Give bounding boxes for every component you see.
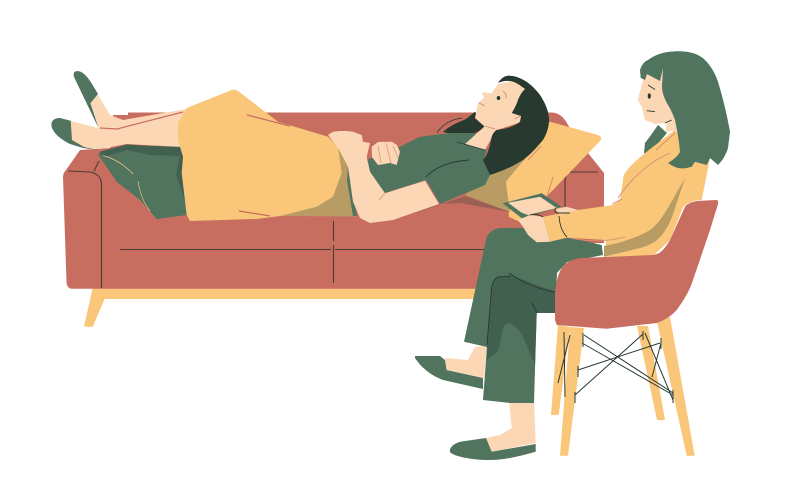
shirt edge bbox=[347, 166, 357, 216]
seat shell bbox=[555, 200, 718, 329]
lower foot bbox=[486, 400, 536, 452]
therapist bbox=[415, 51, 730, 460]
thumb bbox=[555, 207, 578, 215]
upper foot bbox=[91, 95, 187, 147]
back foot bbox=[445, 346, 487, 378]
sofa leg bbox=[84, 288, 118, 327]
chair back legs bbox=[551, 325, 665, 420]
back shoe bbox=[415, 356, 483, 389]
skirt creases bbox=[239, 115, 290, 216]
face bbox=[475, 81, 526, 130]
pillow bbox=[465, 122, 601, 222]
arm and hand bbox=[328, 131, 439, 223]
chair bbox=[555, 200, 718, 456]
yellow skirt bbox=[178, 90, 342, 221]
skirt shadow bbox=[280, 140, 356, 216]
tablet bbox=[503, 193, 562, 218]
shirt seams bbox=[426, 142, 485, 177]
sofa bbox=[63, 112, 604, 327]
back hair bbox=[443, 112, 487, 136]
back hair lock bbox=[644, 125, 667, 155]
right leg bbox=[657, 317, 695, 456]
hair wisp bbox=[437, 118, 462, 132]
hair bbox=[483, 76, 549, 175]
front legs bbox=[560, 327, 584, 456]
neck bbox=[465, 126, 497, 150]
front shoe bbox=[450, 438, 536, 460]
underskirt stitches bbox=[103, 156, 150, 211]
cardigan bbox=[543, 130, 710, 257]
underskirt shade bbox=[100, 144, 187, 206]
green shirt bbox=[367, 133, 490, 204]
trouser lines bbox=[487, 273, 556, 345]
pillow shadow bbox=[465, 153, 530, 212]
pillow creases bbox=[528, 146, 553, 200]
trousers bbox=[464, 228, 603, 403]
trouser shade bbox=[487, 275, 555, 365]
second hand bbox=[372, 142, 400, 165]
hair bbox=[640, 51, 730, 168]
upper shoe bbox=[74, 71, 98, 128]
sofa seams bbox=[68, 161, 598, 288]
green underskirt bbox=[98, 145, 187, 219]
finger lines bbox=[378, 143, 398, 200]
face bbox=[638, 66, 677, 132]
leg contour bbox=[100, 112, 183, 129]
wire frame bbox=[558, 331, 673, 403]
sofa body bbox=[63, 112, 604, 289]
hand bbox=[518, 215, 550, 242]
patient bbox=[51, 71, 549, 223]
hand and cuff lines bbox=[530, 208, 570, 237]
sofa base bbox=[92, 288, 482, 299]
lower leg bbox=[71, 109, 186, 149]
facial features bbox=[479, 91, 520, 129]
lower shoe bbox=[51, 118, 98, 150]
cardigan shadow bbox=[604, 178, 685, 257]
cardigan creases bbox=[570, 133, 675, 241]
arm shadow bbox=[392, 196, 510, 221]
facial features bbox=[647, 85, 672, 123]
